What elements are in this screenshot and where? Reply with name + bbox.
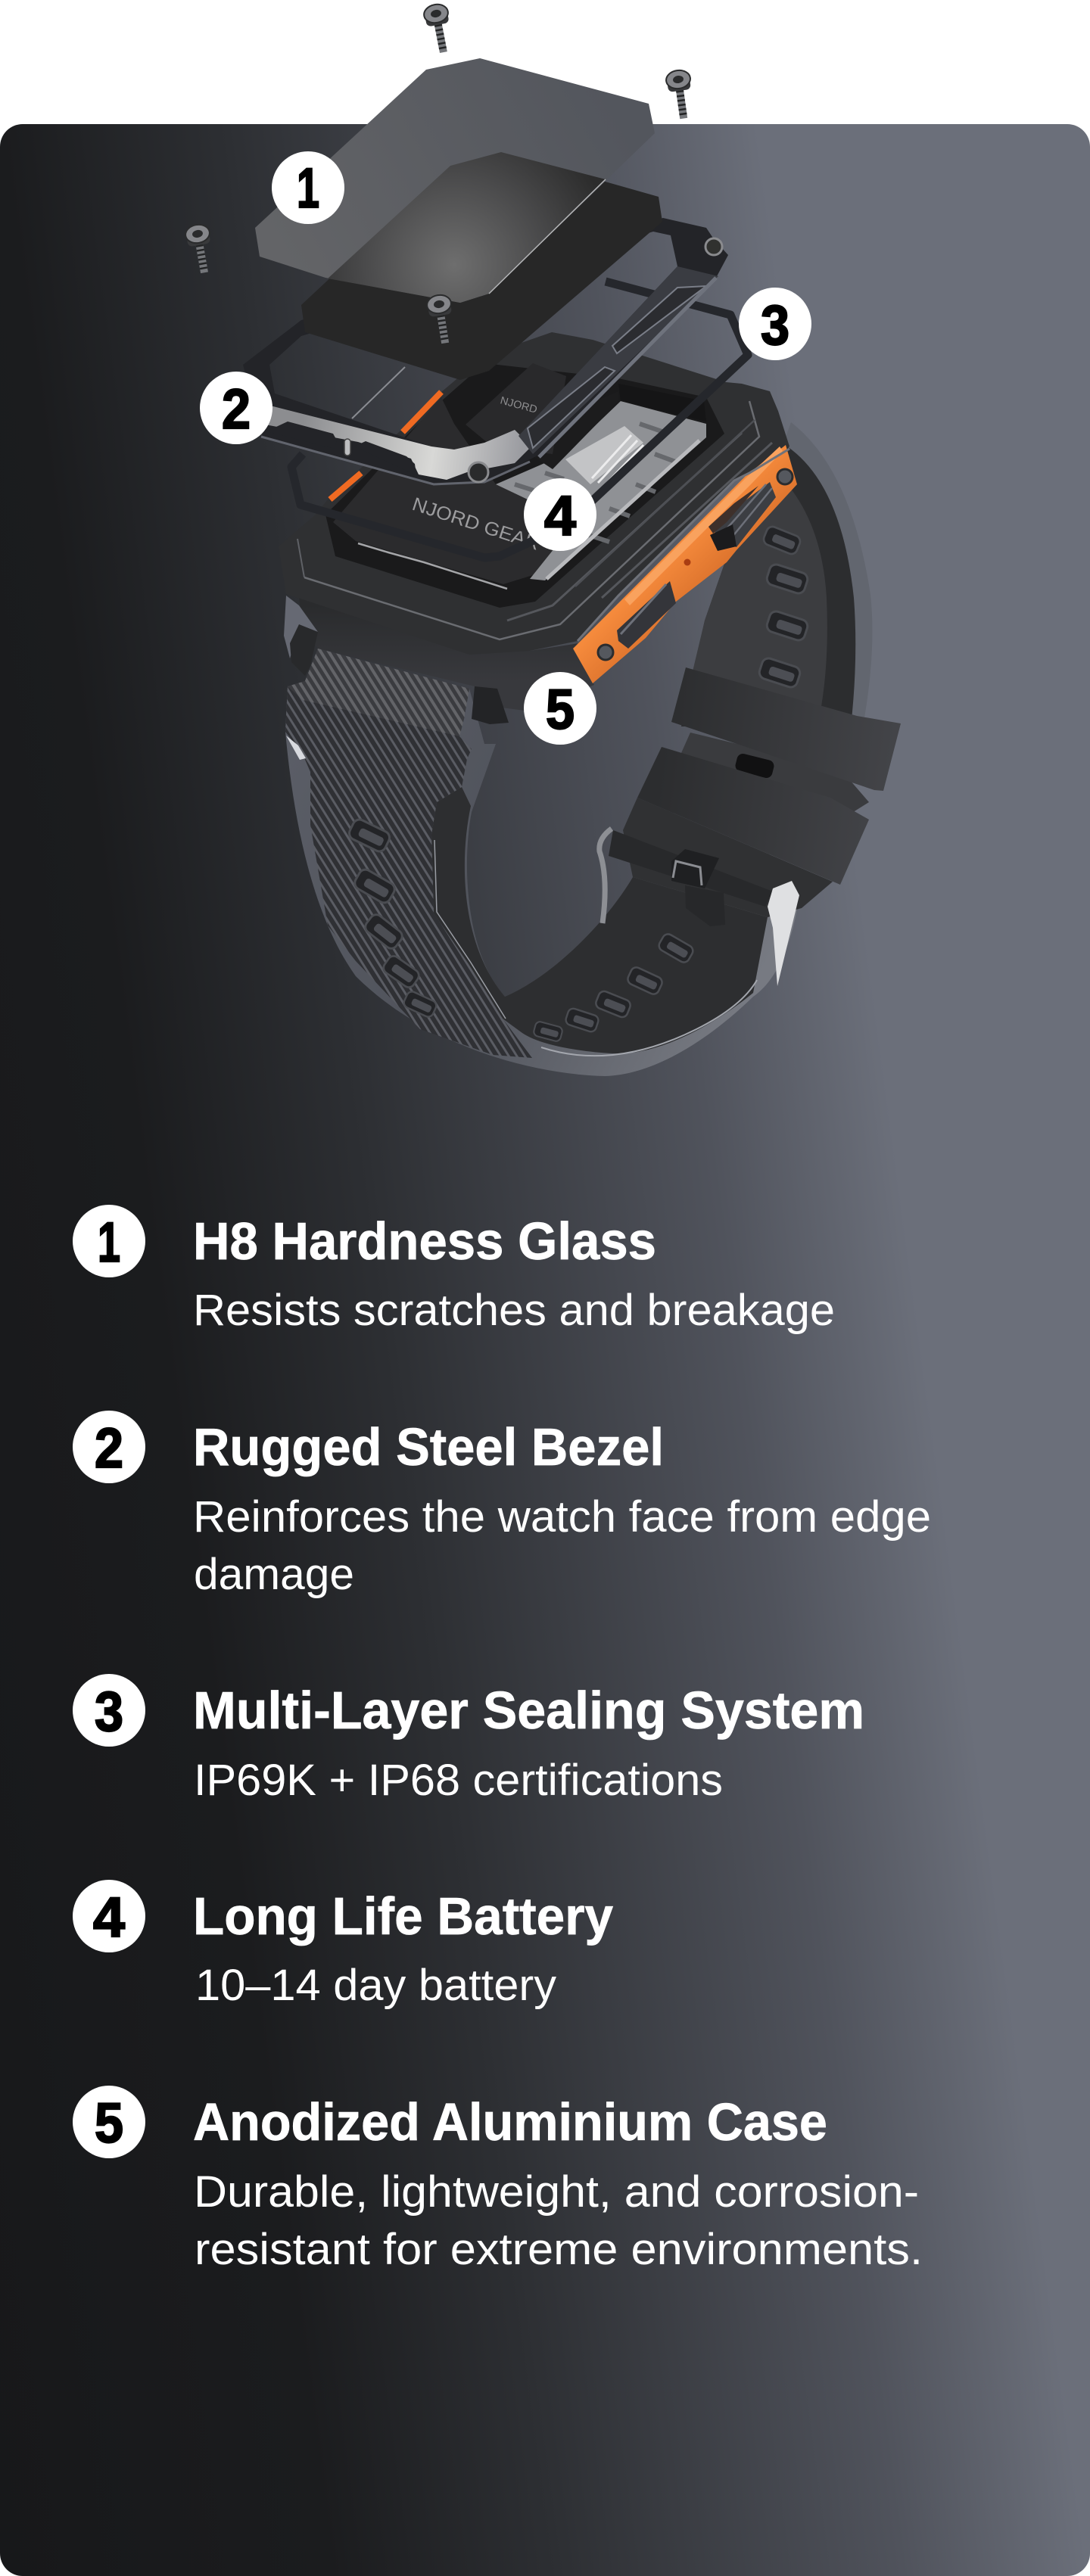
feature 3: 3 — [95, 1680, 123, 1743]
badge 3 on watch — [739, 288, 811, 360]
NJORD GEAR plate — [333, 397, 598, 584]
feature 4: 10–14 day battery — [195, 1961, 556, 2010]
case underside — [299, 598, 594, 711]
inner plates — [304, 401, 759, 639]
feature 3: Multi-Layer Sealing System — [193, 1681, 864, 1740]
buckle — [600, 798, 833, 986]
badge 3 on watch: 3 — [761, 294, 789, 356]
feature 2: Rugged Steel Bezel — [193, 1417, 664, 1476]
glass sheet — [255, 58, 655, 303]
feature 5: Durable, lightweight, and corrosion- — [194, 2167, 919, 2217]
badge 5 on watch: 5 — [546, 678, 575, 741]
body plate — [279, 332, 789, 655]
screw: left — [184, 222, 216, 275]
dark left lug — [290, 624, 318, 676]
feature 1: 1 — [98, 1211, 120, 1274]
screw: right — [665, 69, 696, 120]
badge 4 on watch — [524, 478, 596, 551]
feature 4: Long Life Battery — [193, 1887, 613, 1946]
right lug — [472, 686, 509, 724]
sealing ring — [291, 282, 748, 558]
NJORD battery block — [466, 363, 566, 454]
lower strap with textured face — [285, 649, 799, 1076]
badge 2 on watch — [200, 372, 272, 444]
feature 3 — [73, 1674, 864, 1805]
badge 1 on watch — [272, 151, 344, 224]
watch: exploded view illustration — [184, 2, 901, 1076]
back strap — [681, 422, 872, 726]
feature 4: 4 — [93, 1886, 125, 1949]
feature 2: 2 — [95, 1417, 123, 1479]
feature 4 — [73, 1880, 613, 2010]
feature 2 — [73, 1411, 931, 1599]
circuit board — [496, 401, 706, 580]
feature 2: Reinforces the watch face from edge — [193, 1492, 931, 1542]
display module — [301, 152, 662, 380]
screw: centre — [425, 294, 457, 345]
watch case — [279, 332, 797, 724]
feature 5: Anodized Aluminium Case — [193, 2092, 827, 2151]
badge 4 on watch: 4 — [544, 484, 576, 547]
side buttons — [712, 482, 776, 547]
screw: top — [422, 2, 456, 54]
badge 2 on watch: 2 — [222, 378, 251, 440]
feature 5: 5 — [95, 2092, 123, 2154]
feature 2: damage — [194, 1550, 354, 1599]
strap loops — [637, 667, 901, 885]
feature 5 — [73, 2086, 923, 2274]
feature 1: H8 Hardness Glass — [193, 1212, 656, 1271]
text: NJORD: NJORD — [499, 394, 539, 415]
badge 5 on watch — [524, 672, 596, 745]
feature 1 — [73, 1205, 835, 1335]
steel bezel — [243, 218, 728, 484]
feature 5: resistant for extreme environments. — [195, 2225, 923, 2274]
gray left lug edge — [284, 596, 318, 658]
glass over display overlap — [328, 152, 606, 303]
badge 1 on watch: 1 — [297, 157, 319, 219]
orange side — [573, 445, 797, 683]
feature 1: Resists scratches and breakage — [193, 1286, 835, 1335]
feature 3: IP69K + IP68 certifications — [194, 1756, 723, 1805]
orange inner stripes — [330, 392, 441, 499]
text: NJORD GEAR: NJORD GEAR — [410, 493, 542, 555]
